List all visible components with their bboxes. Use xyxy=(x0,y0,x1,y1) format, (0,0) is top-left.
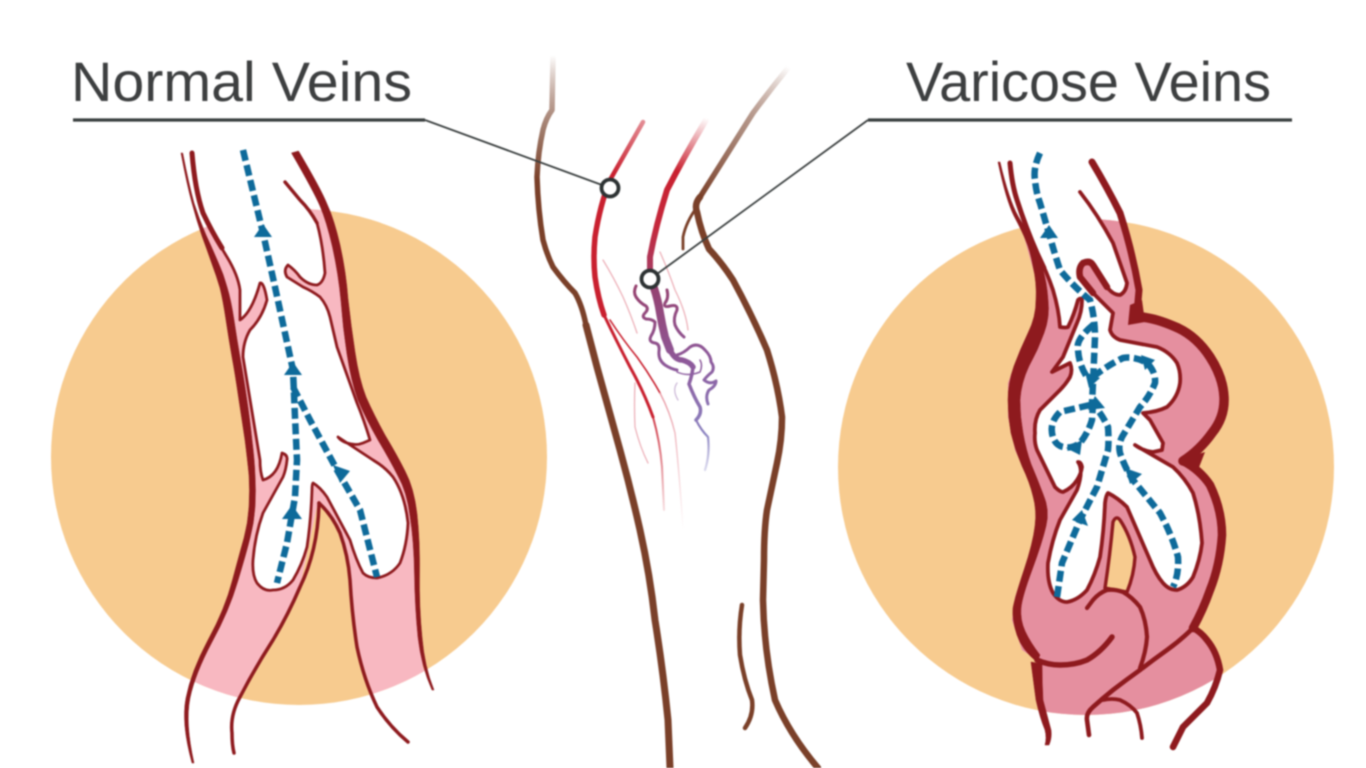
title: Varicose Veins: Varicose Veins xyxy=(906,50,1271,113)
vein wall fill xyxy=(194,209,425,698)
open vein lumen with valves xyxy=(192,153,408,590)
marker: varicose vein xyxy=(642,270,658,288)
blood flow dashed path xyxy=(243,150,377,583)
orange background circle xyxy=(838,219,1334,715)
marker: normal vein xyxy=(602,180,618,196)
panel: normal vein illustration xyxy=(51,150,547,763)
leg outline xyxy=(537,58,818,768)
panel: varicose vein illustration xyxy=(838,153,1334,747)
swollen valve highlights xyxy=(1010,163,1107,293)
flow arrowheads xyxy=(254,224,350,519)
flow arrowheads xyxy=(1040,225,1155,526)
vein outer walls xyxy=(181,151,434,763)
gap between lower vein branches xyxy=(1105,518,1135,592)
swollen vein fill xyxy=(1007,219,1220,716)
leader line: normal veins xyxy=(425,120,602,185)
normal vein on leg xyxy=(594,122,683,528)
varicose vein on leg xyxy=(634,120,716,470)
orange background circle xyxy=(51,209,547,705)
blood flow dashed path xyxy=(1035,153,1178,597)
panel: central leg illustration xyxy=(425,58,868,768)
open lumen with collapsed valves xyxy=(1010,163,1202,602)
title: Normal Veins: Normal Veins xyxy=(71,50,412,113)
vein outer walls and loops xyxy=(998,162,1224,747)
leader line: varicose veins xyxy=(657,120,868,274)
